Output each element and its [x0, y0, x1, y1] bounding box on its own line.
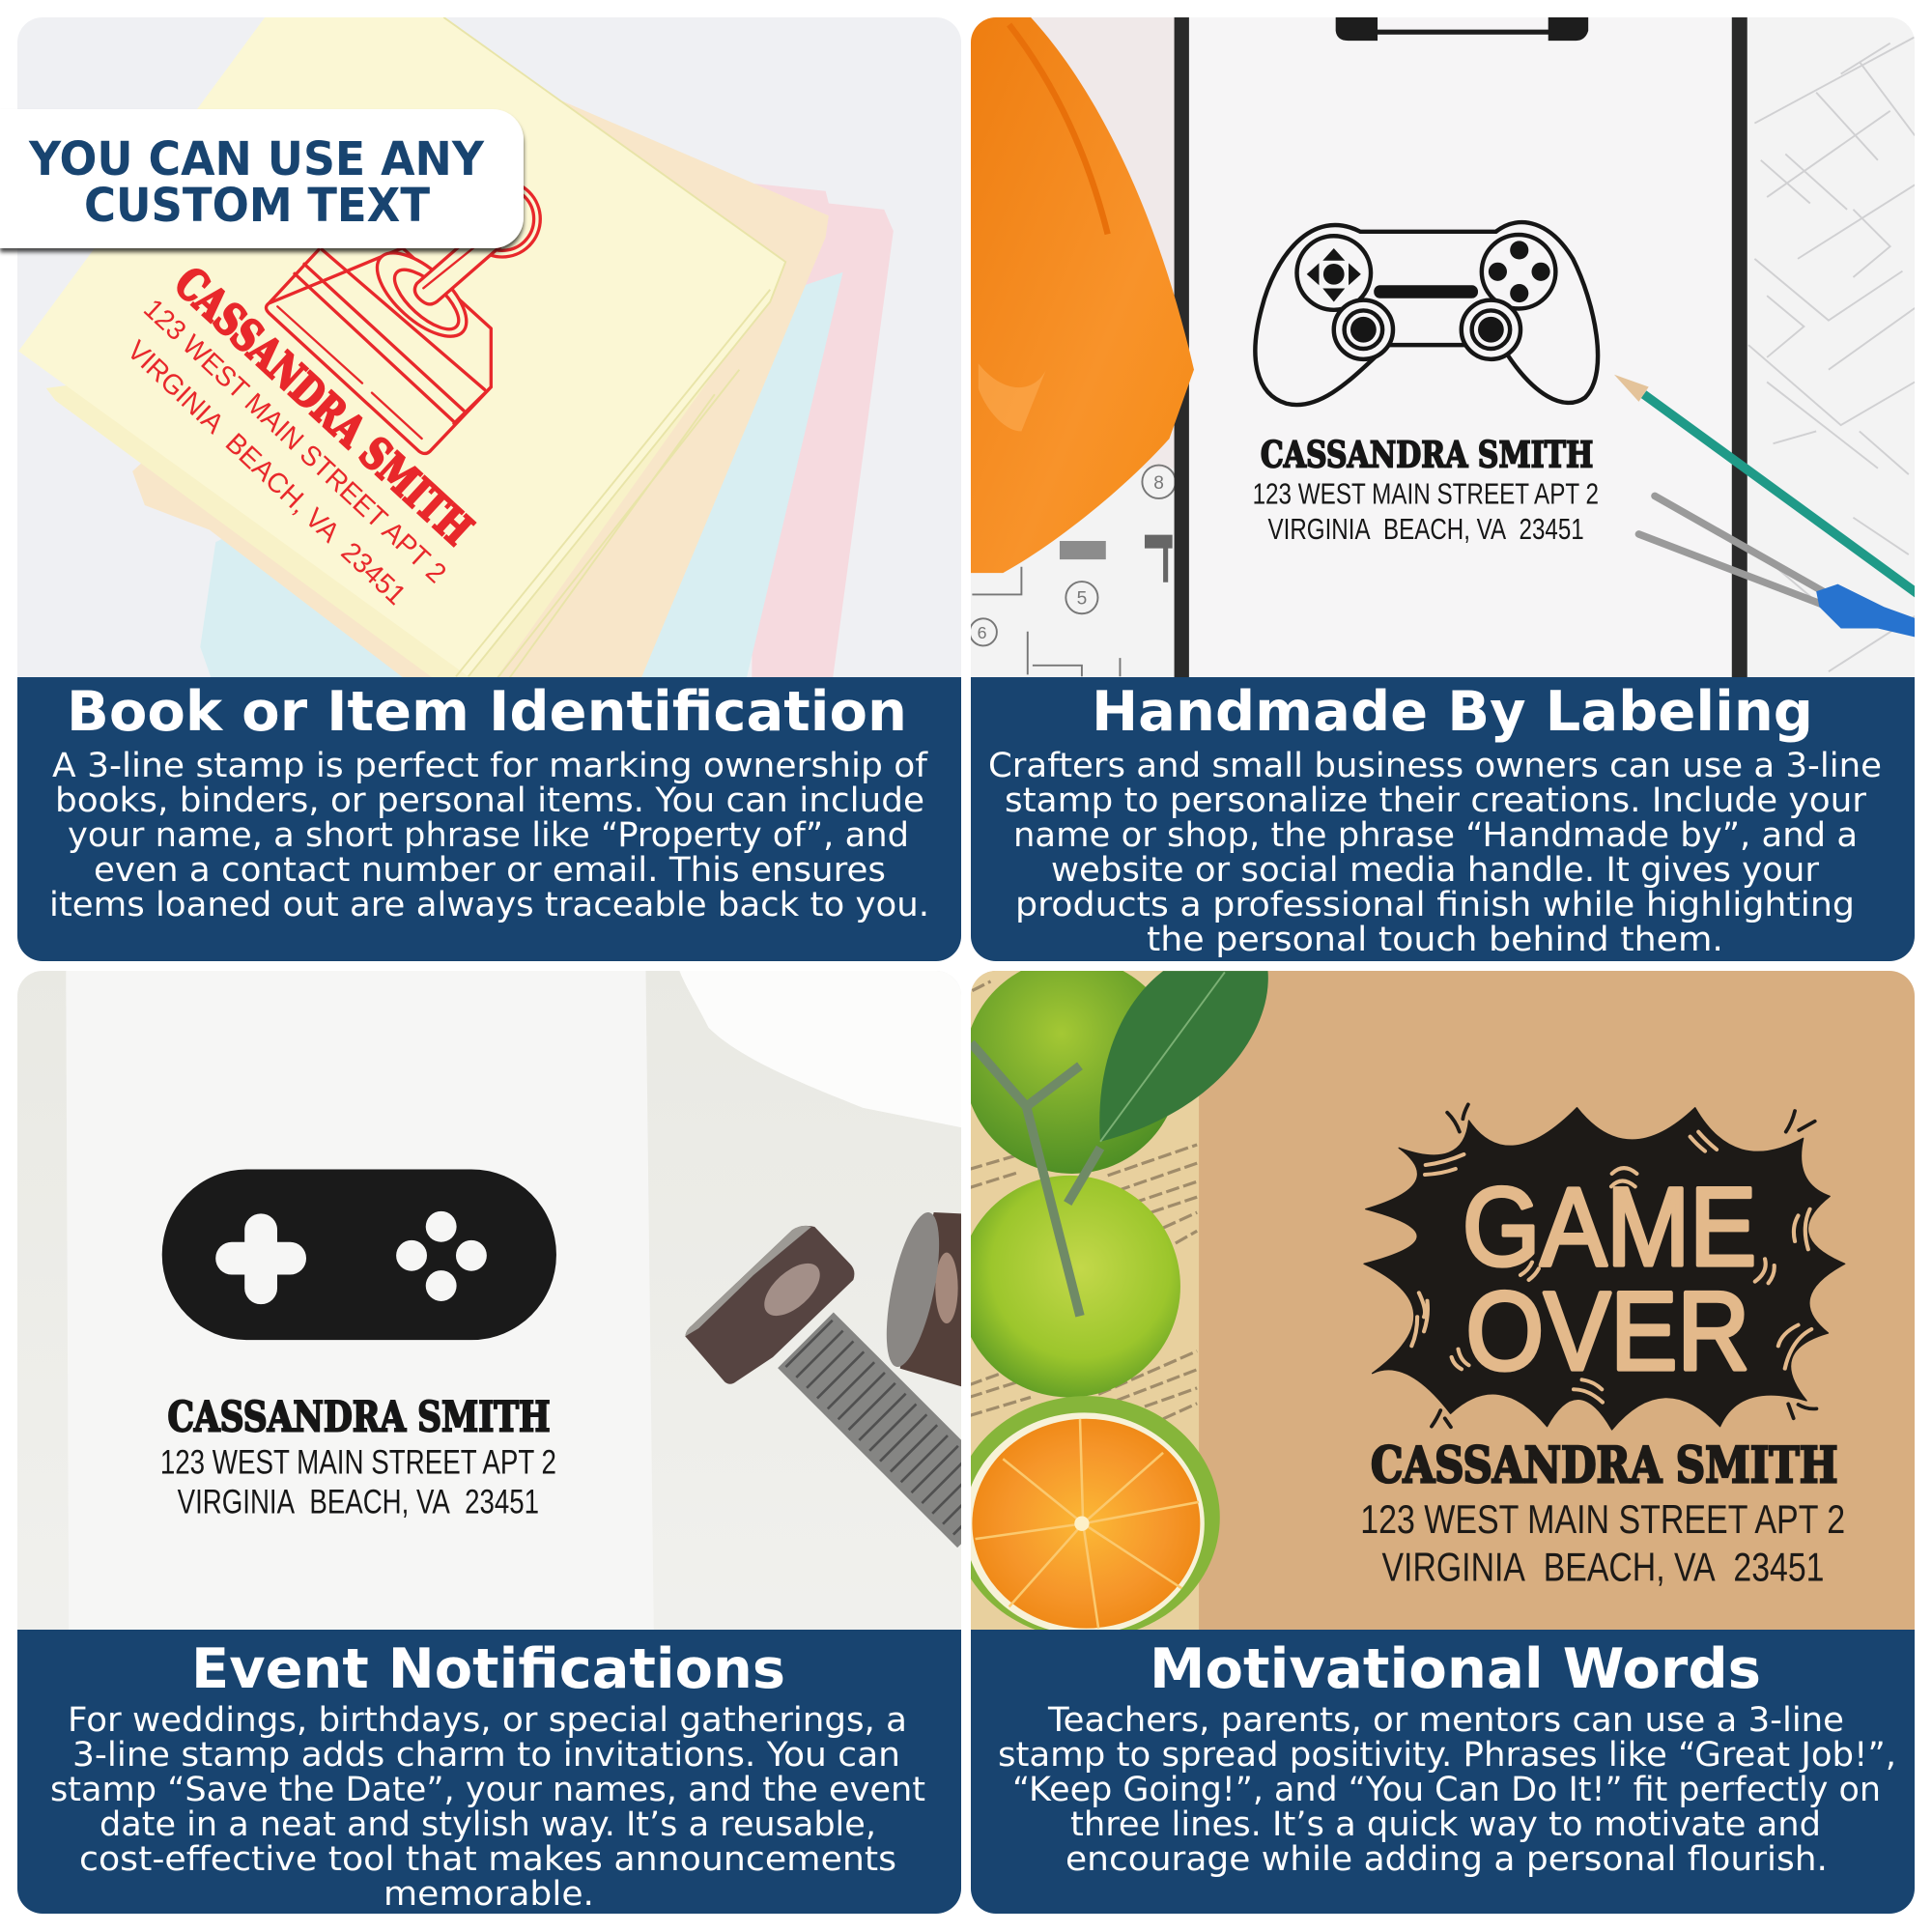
callout: you can use any custom text	[0, 109, 524, 248]
body text: memorable.	[384, 1875, 594, 1914]
photo: stacked coloured paper with red stamp	[17, 17, 961, 677]
outer ticks	[1432, 1104, 1816, 1427]
caption bar	[971, 1630, 1915, 1914]
stamp text: CASSANDRA SMITH	[1261, 433, 1593, 475]
body text: cost-effective tool that makes announcements	[79, 1840, 896, 1879]
stamp text: CASSANDRA SMITH	[167, 1393, 551, 1442]
pencil	[1644, 394, 1927, 601]
bolt shaft	[806, 1340, 985, 1520]
photo: clipboard, helmet, blueprint and controller stamp: 8	[1153, 473, 1164, 494]
bolt head	[685, 1226, 854, 1384]
body text: Crafters and small business owners can use a 3-line	[988, 747, 1882, 785]
stamp: game controller icon	[1255, 222, 1598, 405]
body text: encourage while adding a personal flourish.	[1065, 1840, 1828, 1879]
body text: For weddings, birthdays, or special gatherings, a	[68, 1701, 907, 1740]
body text: “Keep Going!”, and “You Can Do It!” fit perfectly on	[1012, 1771, 1881, 1809]
body text: name or shop, the phrase “Handmade by”, and a	[1013, 816, 1858, 855]
body text	[988, 747, 1882, 959]
body text: 3-line stamp adds charm to invitations. You can	[72, 1736, 900, 1775]
blueprint lines	[1748, 37, 1915, 671]
callout: you can use any custom text: CUSTOM TEXT	[84, 179, 430, 233]
body text: the personal touch behind them.	[1147, 921, 1723, 959]
caption bar	[17, 1630, 961, 1914]
body text: products a professional finish while highlighting	[1015, 886, 1855, 924]
body text	[998, 1701, 1896, 1879]
body text: even a contact number or email. This ensures	[94, 851, 886, 890]
towel	[680, 971, 961, 1127]
stamp impression: red address text: 123 WEST MAIN STREET APT 2	[137, 294, 452, 589]
body text: items loaned out are always traceable back to you.	[49, 886, 929, 924]
body text: three lines. It’s a quick way to motivate and	[1070, 1805, 1821, 1844]
stem	[971, 1043, 1100, 1316]
callout: you can use any custom text: YOU CAN USE ANY	[28, 132, 485, 186]
fruit: top lime	[971, 971, 1167, 1174]
heading: Motivational Words	[1150, 1637, 1761, 1701]
fruit: middle lime	[958, 1176, 1180, 1397]
heading: Event Notifications	[191, 1637, 785, 1701]
stamp: pill controller icon	[162, 1169, 556, 1340]
body text: your name, a short phrase like “Property of”, and	[68, 816, 909, 855]
stamp text: 123 WEST MAIN STREET APT 2	[160, 1444, 556, 1482]
body text: stamp to spread positivity. Phrases like “Great Job!”,	[998, 1736, 1896, 1775]
stamp text	[1253, 433, 1599, 546]
body text: A 3-line stamp is perfect for marking ownership of	[52, 747, 928, 785]
leaf	[1099, 971, 1268, 1142]
photo: card with pill controller stamp, towel and bolts	[17, 971, 961, 1630]
hard hat	[966, 17, 1194, 573]
body text: stamp to personalize their creations. Include your	[1005, 781, 1867, 820]
caption bar	[17, 677, 961, 961]
clipboard	[1175, 0, 1747, 708]
body text: Teachers, parents, or mentors can use a 3-line	[1047, 1701, 1844, 1740]
plan marks lower left	[970, 466, 1176, 676]
game over lettering: GAME	[1463, 1164, 1756, 1289]
stamp text	[1360, 1436, 1845, 1590]
stamp text: VIRGINIA BEACH, VA 23451	[1382, 1545, 1824, 1590]
body text: books, binders, or personal items. You can include	[55, 781, 924, 820]
burst accents	[1411, 1132, 1811, 1403]
stamp impression: red address text: VIRGINIA BEACH, VA 23451	[121, 335, 412, 611]
photo: clipboard, helmet, blueprint and controller stamp: 6	[978, 623, 987, 642]
photo: kraft paper, citrus and game over stamp	[971, 971, 1915, 1630]
stamp text: VIRGINIA BEACH, VA 23451	[1268, 513, 1584, 546]
photo: clipboard, helmet, blueprint and controller stamp: 5	[1077, 589, 1087, 610]
panel: event notifications	[0, 966, 985, 1914]
fruit: cut citrus	[971, 1396, 1220, 1630]
panel: motivational words	[952, 958, 1932, 1914]
body text	[50, 1701, 925, 1914]
body text: stamp “Save the Date”, your names, and the event	[50, 1771, 925, 1809]
stamp text: CASSANDRA SMITH	[1371, 1436, 1837, 1494]
game over lettering	[1465, 1184, 1754, 1373]
stamp text: VIRGINIA BEACH, VA 23451	[178, 1483, 539, 1520]
game over lettering: OVER	[1465, 1268, 1749, 1393]
stamp impression: joystick icon	[266, 181, 540, 453]
right bolt	[887, 1212, 961, 1387]
panel: book or item identification	[0, 0, 985, 961]
heading: Book or Item Identification	[67, 680, 907, 744]
body text: website or social media handle. It gives your	[1051, 851, 1820, 890]
stamp text: 123 WEST MAIN STREET APT 2	[1253, 478, 1599, 511]
body text	[49, 747, 929, 924]
heading: Handmade By Labeling	[1092, 680, 1813, 744]
photo: clipboard, helmet, blueprint and controller stamp	[966, 0, 1932, 708]
stamp: game over burst	[1364, 1104, 1845, 1430]
compass	[1638, 496, 1829, 607]
caption bar	[971, 677, 1915, 961]
bolts	[685, 1208, 985, 1520]
panel: handmade by labeling	[966, 0, 1932, 961]
newspaper strip	[966, 966, 1199, 1674]
stamp text	[160, 1393, 556, 1520]
stamp impression: red address text: CASSANDRA SMITH	[165, 257, 482, 554]
body text: date in a neat and stylish way. It’s a reusable,	[99, 1805, 876, 1844]
